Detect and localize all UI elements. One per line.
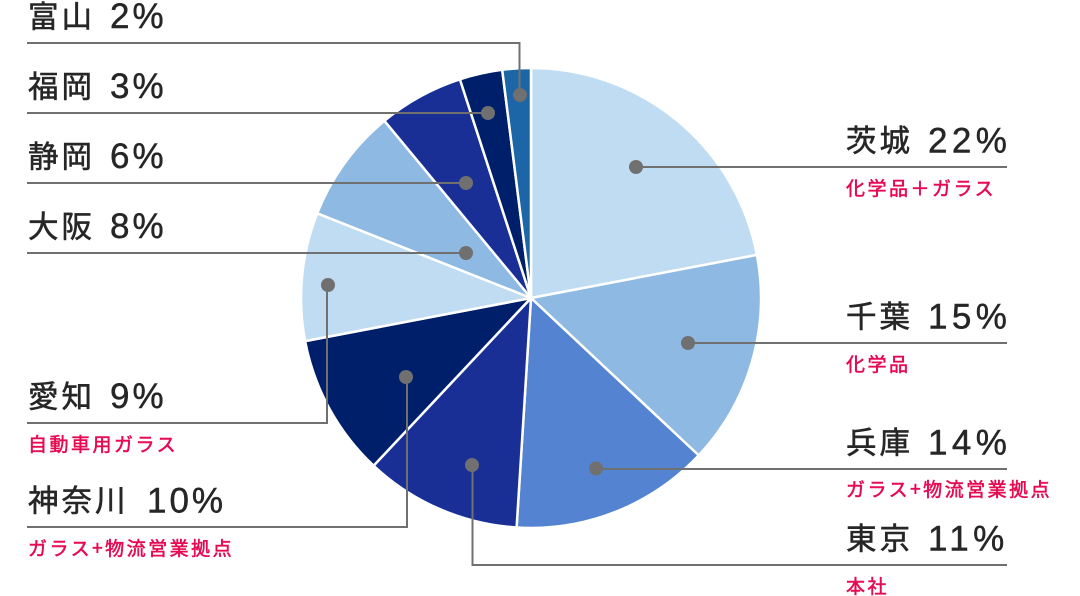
label: 大阪 8%: 大阪 xyxy=(28,202,95,246)
label: 兵庫 14% ガラス+物流営業拠点: 14% xyxy=(928,424,1011,462)
label: 兵庫 14% ガラス+物流営業拠点 xyxy=(589,418,1052,502)
label: 神奈川 10% ガラス+物流営業拠点: ガラス+物流営業拠点 xyxy=(28,534,234,561)
slice: 千葉 15% xyxy=(531,255,761,455)
label: 千葉 15% 化学品: 化学品 xyxy=(846,350,911,377)
label: 静岡 6%: 静岡 xyxy=(28,132,95,176)
slice: 愛知 9% xyxy=(301,213,531,341)
label: 茨城 22% 化学品＋ガラス xyxy=(629,116,1011,201)
label: 静岡 6%: 6% xyxy=(110,137,167,176)
label: 兵庫 14% ガラス+物流営業拠点: ガラス+物流営業拠点 xyxy=(846,475,1052,502)
slice: 兵庫 14% xyxy=(517,298,699,528)
label: 茨城 22% 化学品＋ガラス: 22% xyxy=(928,122,1011,160)
label: 愛知 9% 自動車用ガラス xyxy=(27,278,335,457)
label: 福岡 3%: 3% xyxy=(110,67,167,106)
label: 愛知 9% 自動車用ガラス: 9% xyxy=(110,377,167,416)
label: 静岡 6% xyxy=(27,132,473,190)
label: 大阪 8%: 8% xyxy=(110,207,167,246)
slice: 東京 11% xyxy=(374,298,531,528)
label: 東京 11% 本社 xyxy=(465,458,1009,596)
label: 茨城 22% 化学品＋ガラス: 化学品＋ガラス xyxy=(846,174,996,201)
slice: 茨城 22% xyxy=(531,68,757,298)
label: 千葉 15% 化学品: 千葉 xyxy=(846,292,913,336)
label: 神奈川 10% ガラス+物流営業拠点: 10% xyxy=(147,482,226,520)
label: 大阪 8% xyxy=(27,202,473,260)
pie chart xyxy=(301,68,761,528)
label: 東京 11% 本社: 11% xyxy=(928,520,1009,558)
slice: 大阪 8% xyxy=(317,121,531,298)
slice: 富山 2% xyxy=(502,68,531,298)
label: 神奈川 10% ガラス+物流営業拠点: 神奈川 xyxy=(28,476,128,520)
label: 愛知 9% 自動車用ガラス: 自動車用ガラス xyxy=(28,430,178,457)
label: 千葉 15% 化学品 xyxy=(681,292,1011,377)
label: 東京 11% 本社: 東京 xyxy=(846,514,913,558)
slice: 静岡 6% xyxy=(384,79,531,298)
label: 福岡 3% xyxy=(27,62,495,120)
label: 千葉 15% 化学品: 15% xyxy=(928,298,1011,336)
slice: 神奈川 10% xyxy=(305,298,531,466)
label: 福岡 3%: 福岡 xyxy=(28,62,95,106)
slice: 福岡 3% xyxy=(460,70,531,298)
label: 神奈川 10% ガラス+物流営業拠点 xyxy=(27,370,413,561)
label: 茨城 22% 化学品＋ガラス: 茨城 xyxy=(846,116,913,160)
label: 愛知 9% 自動車用ガラス: 愛知 xyxy=(28,372,95,416)
label: 富山 2% xyxy=(27,0,527,102)
label: 兵庫 14% ガラス+物流営業拠点: 兵庫 xyxy=(846,418,913,462)
